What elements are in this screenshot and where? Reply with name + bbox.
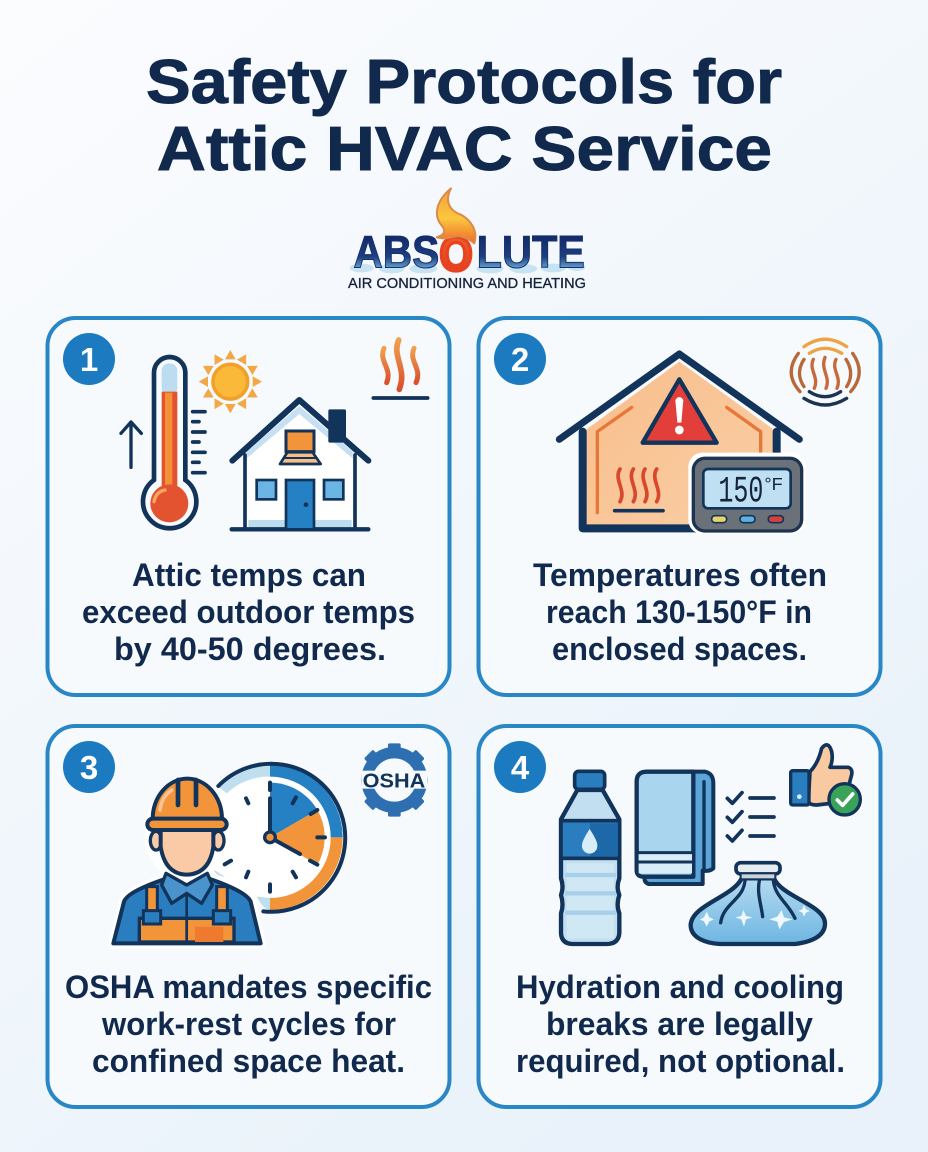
panel 3: OSHA work-rest cycles <box>48 726 450 1107</box>
icon: clock <box>204 764 345 912</box>
icon: digital thermometer reading 150°F: 150 <box>718 472 763 514</box>
panel 1 text <box>82 557 415 667</box>
panel 4 text: breaks are legally <box>546 1006 813 1042</box>
badge 2 <box>494 333 546 385</box>
icon: heat waves <box>373 340 428 398</box>
logo wordmark: ABS <box>353 226 439 277</box>
thermometer ticks <box>193 412 205 473</box>
panel 3 text: OSHA mandates specific <box>65 969 432 1005</box>
icon: folded towel <box>637 772 713 884</box>
icon: thermometer <box>143 357 196 528</box>
title <box>146 48 782 184</box>
title: Safety Protocols for <box>146 48 782 117</box>
logo: Absolute Air Conditioning and Heating: AIR CONDITIONING AND HEATING <box>348 276 586 292</box>
icon: OSHA gear <box>362 743 427 817</box>
panel 4 text: required, not optional. <box>516 1043 845 1079</box>
panel 4 text: Hydration and cooling <box>516 969 844 1005</box>
panel 1 text: Attic temps can <box>132 557 366 593</box>
panel 2 text: reach 130-150°F in <box>546 594 812 630</box>
badge 4 <box>494 741 546 793</box>
icon: rising arrow <box>121 422 141 467</box>
title: Attic HVAC Service <box>157 115 772 184</box>
panel 1 text: exceed outdoor temps <box>82 594 415 630</box>
logo wordmark: LUTE <box>477 226 585 277</box>
panel 4 text <box>516 969 845 1079</box>
icon: digital thermometer reading 150°F: °F <box>764 474 783 494</box>
icon: radiating heat <box>791 339 859 405</box>
panel 1: attic temperatures <box>48 318 450 695</box>
icon: sun <box>199 350 262 413</box>
icon: worker in hard hat <box>113 779 261 943</box>
panel 2: enclosed space temperatures <box>478 318 880 695</box>
badge 3: 3 <box>80 749 98 786</box>
icon: attic cross-section <box>559 354 799 528</box>
icon: house with attic <box>232 400 368 529</box>
panel 2 text: enclosed spaces. <box>552 631 807 667</box>
icon: ice pack <box>691 863 825 944</box>
badge 1 <box>63 333 115 385</box>
icon: digital thermometer reading 150°F <box>688 453 806 534</box>
icon: OSHA gear: OSHA <box>363 769 425 792</box>
badge 4: 4 <box>511 749 530 786</box>
icon: thumbs up with check <box>791 745 860 815</box>
logo: Absolute Air Conditioning and Heating <box>348 188 586 292</box>
logo wordmark <box>350 226 585 282</box>
panel 2 text <box>533 557 827 667</box>
panel 3 text: confined space heat. <box>92 1043 405 1079</box>
panel 3 text <box>65 969 432 1079</box>
logo wordmark: O <box>439 228 473 282</box>
icon: logo flame <box>437 188 475 243</box>
panel 3 text: work-rest cycles for <box>101 1006 396 1042</box>
icon: checklist <box>727 793 774 841</box>
panel 1 text: by 40-50 degrees. <box>114 631 386 667</box>
badge 3 <box>63 741 115 793</box>
panel 2 text: Temperatures often <box>533 557 827 593</box>
icon: water bottle <box>561 771 619 944</box>
badge 2: 2 <box>511 341 529 378</box>
badge 1: 1 <box>80 341 98 378</box>
panel 4: hydration and cooling <box>478 726 880 1107</box>
